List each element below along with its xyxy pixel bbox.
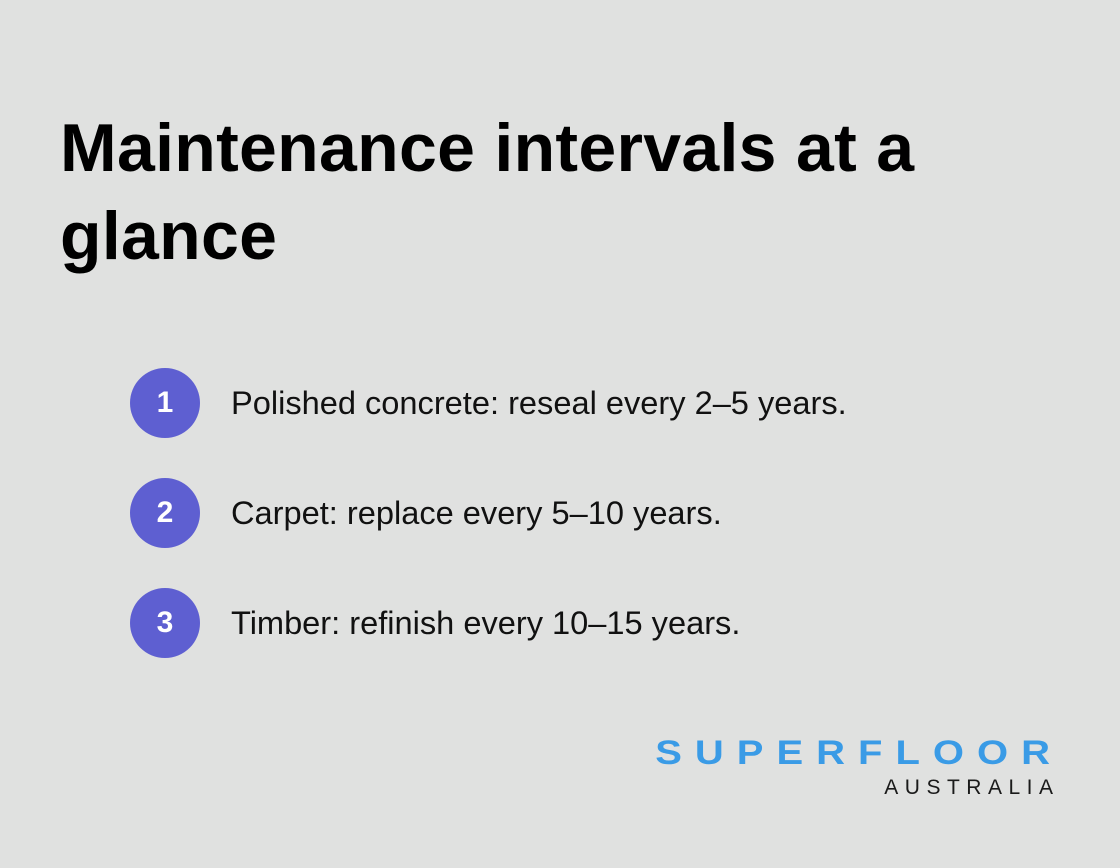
logo wordmark: SUPERFLOOR	[655, 734, 1063, 772]
badge 2: 2	[157, 496, 173, 529]
badge 1: 1	[157, 386, 173, 419]
badge 1	[130, 368, 200, 438]
item 2	[130, 478, 722, 548]
text 3: Timber: refinish every 10–15 years.	[231, 604, 740, 641]
badge 3	[130, 588, 200, 658]
text 1: Polished concrete: reseal every 2–5 years.	[231, 384, 847, 421]
item 3	[130, 588, 740, 658]
item 1	[130, 368, 847, 438]
title: Maintenance intervals at a glance	[60, 110, 914, 274]
text 2: Carpet: replace every 5–10 years.	[231, 494, 722, 531]
badge 2	[130, 478, 200, 548]
logo	[655, 734, 1063, 799]
badge 3: 3	[157, 606, 173, 639]
logo subtitle: AUSTRALIA	[884, 776, 1060, 799]
